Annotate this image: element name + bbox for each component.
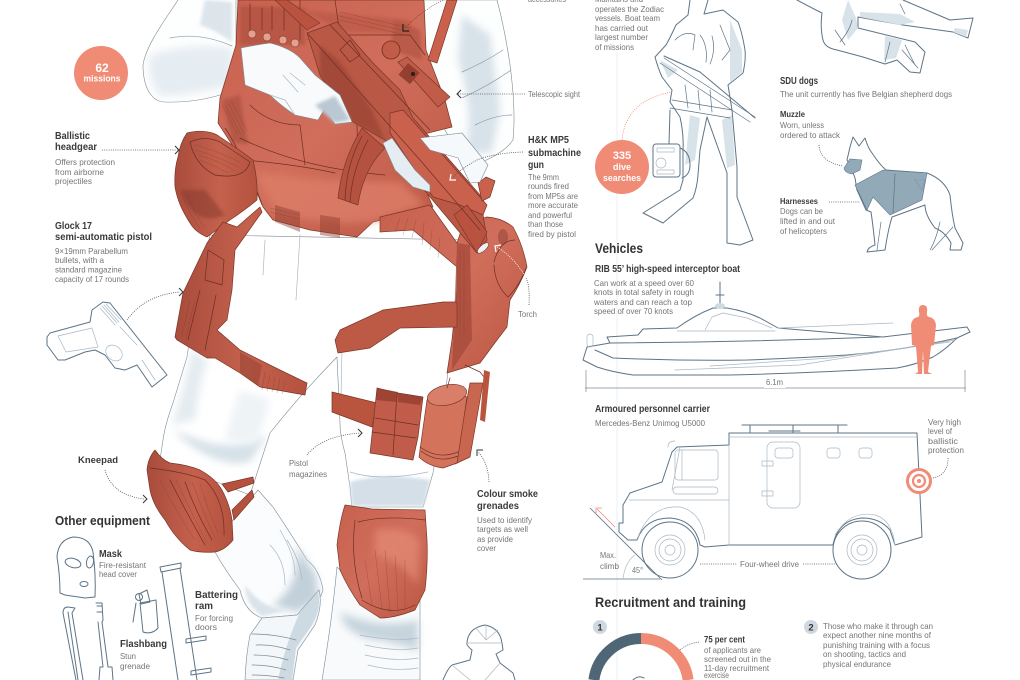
text: SDU dogs xyxy=(780,76,952,99)
label: colour smoke grenades: as provide xyxy=(477,534,513,544)
soldier: magazine pouch xyxy=(332,388,423,460)
soldier: submachine gun xyxy=(275,0,495,255)
text: armoured personnel carrier: Mercedes-Benz Unimog U5000 xyxy=(595,418,705,428)
text: muzzle xyxy=(780,109,843,166)
text: mask: head cover xyxy=(99,569,137,579)
label: ballistic headgear: Ballistic xyxy=(55,131,90,142)
label: colour smoke grenades: cover xyxy=(477,543,496,553)
text: battering ram: ram xyxy=(195,601,213,612)
text: harnesses: of helicopters xyxy=(780,226,827,236)
text: flashbang: Stun xyxy=(120,651,136,661)
panel: recruitment and training xyxy=(593,595,933,680)
badge: step 2 xyxy=(804,620,818,634)
heading: recruitment and training: Recruitment and training xyxy=(595,595,746,610)
boat dimension: 6.1m: 6.1m xyxy=(766,377,783,387)
soldier: shoe xyxy=(245,590,320,680)
diagram: maximum climb angle: 45° xyxy=(632,565,643,575)
text: 75 per cent: exercise xyxy=(704,670,729,680)
arrow: ballistic headgear xyxy=(102,146,179,154)
text: 75 per cent: of applicants are xyxy=(704,645,761,655)
label: Glock 17 pistol: standard magazine xyxy=(55,264,122,274)
stat: 335 dive searches: 335 xyxy=(613,150,631,162)
soldier: pistol holster and leg strap xyxy=(175,207,307,395)
text: harnesses xyxy=(780,196,860,236)
label: H&K MP5 submachine gun: and powerful xyxy=(528,210,572,220)
text: 75 per cent: screened out in the xyxy=(704,654,771,664)
label: H&K MP5 submachine gun: than those xyxy=(528,219,563,229)
label: four-wheel drive xyxy=(700,559,837,569)
icon: rifle tool xyxy=(96,603,113,680)
label: pistol magazines: Pistol xyxy=(289,458,308,468)
text: mask xyxy=(99,549,147,579)
label: pistol magazines: magazines xyxy=(289,469,327,479)
diagram: maximum climb angle: climb xyxy=(600,561,619,571)
icon: dog with harness xyxy=(844,137,963,252)
diagram: maximum climb angle: Max. xyxy=(600,550,616,560)
label: ballistic headgear: headgear xyxy=(55,142,97,153)
text: RIB boat: knots in total safety in rough xyxy=(594,287,694,297)
label: H&K MP5 submachine gun: H&K MP5 xyxy=(528,135,569,146)
label: pistol magazines xyxy=(289,429,362,479)
soldier: thigh strap xyxy=(335,302,457,353)
chart: donut 75 per cent xyxy=(594,638,688,680)
text: RIB boat: RIB 55’ high-speed interceptor boat xyxy=(595,264,741,275)
soldier: trousers xyxy=(160,235,470,507)
text: harnesses: Harnesses xyxy=(780,196,818,206)
text: ballistic protection: level of xyxy=(928,426,953,436)
text: harnesses: Dogs can be xyxy=(780,206,823,216)
text: boat team description xyxy=(595,0,665,52)
text: boat team description: has carried out xyxy=(595,23,649,33)
label: ballistic headgear: from airborne xyxy=(55,167,104,177)
boat dimension: 6.1m xyxy=(585,370,966,392)
text: muzzle: Muzzle xyxy=(780,109,805,119)
soldier: left kneepad and straps xyxy=(147,450,254,552)
label: colour smoke grenades xyxy=(477,450,538,553)
label: telescopic sight: Telescopic sight xyxy=(528,89,581,99)
icon: rappelling soldier xyxy=(797,0,973,73)
label: ballistic headgear xyxy=(55,131,115,186)
icon: ballistic target xyxy=(908,470,930,492)
text: battering ram xyxy=(195,590,238,632)
text: step 2 description xyxy=(823,621,933,669)
label: kneepad xyxy=(78,455,147,503)
label: Glock 17 pistol: capacity of 17 rounds xyxy=(55,274,129,284)
label: Glock 17 pistol xyxy=(55,221,152,284)
text: boat team description: vessels. Boat team xyxy=(595,13,660,23)
label: H&K MP5 submachine gun: The 9mm xyxy=(528,172,559,182)
icon: kneeling soldier xyxy=(443,625,515,680)
text: RIB boat: waters and can reach a top xyxy=(593,297,692,307)
icon: boat xyxy=(583,282,970,375)
label: H&K MP5 submachine gun: more accurate xyxy=(528,200,578,210)
soldier: right glove xyxy=(241,43,352,124)
text: 75 per cent: 11-day recruitment xyxy=(704,663,770,673)
text: ballistic protection: protection xyxy=(928,445,964,455)
text: step 2 description: expect another nine months of xyxy=(823,630,932,640)
icon: battering ram xyxy=(160,563,211,680)
text: RIB boat: Can work at a speed over 60 xyxy=(594,278,694,288)
text: step 2 description: Those who make it through can xyxy=(823,621,933,631)
stat: 335 dive searches: searches xyxy=(603,173,641,183)
soldier: shoulder strap xyxy=(428,0,457,63)
icon: flashbang xyxy=(133,590,158,633)
heading: other equipment: Other equipment xyxy=(55,514,151,528)
text: battering ram: For forcing xyxy=(195,613,233,623)
soldier: vest upper xyxy=(218,0,452,238)
panel: other equipment xyxy=(55,514,238,680)
soldier: right kneepad xyxy=(337,505,427,618)
icon: mask xyxy=(57,537,95,598)
heading: vehicles: Vehicles xyxy=(595,241,643,256)
soldier: right sleeve xyxy=(425,0,514,175)
text: step 2 description: on shooting, tactics and xyxy=(823,649,906,659)
label: colour smoke grenades: Colour smoke xyxy=(477,489,538,500)
text: SDU dogs: SDU dogs xyxy=(780,76,818,87)
label: ballistic headgear: Offers protection xyxy=(55,157,115,167)
label: colour smoke grenades: Used to identify xyxy=(477,515,533,525)
text: muzzle: ordered to attack xyxy=(780,130,841,140)
label: colour smoke grenades: grenades xyxy=(477,501,519,512)
arrow: pistol xyxy=(127,288,183,320)
label: telescopic sight xyxy=(457,89,581,99)
text: muzzle: Worn, unless xyxy=(780,120,824,130)
label: kneepad: Kneepad xyxy=(78,455,118,466)
label: H&K MP5 submachine gun: submachine xyxy=(528,148,581,159)
text: ballistic protection: Very high xyxy=(928,417,961,427)
text: armoured personnel carrier: Armoured personnel carrier xyxy=(595,404,710,415)
stat: 62 missions: missions xyxy=(84,74,120,84)
label: H&K MP5 submachine gun: gun xyxy=(528,160,544,171)
soldier: lower left leg and shin xyxy=(215,490,323,618)
soldier: ballistic headgear pouch xyxy=(175,131,257,237)
label: four-wheel drive: Four-wheel drive xyxy=(740,559,799,569)
badge: step 1: 1 xyxy=(597,622,603,634)
soldier: lower right leg xyxy=(322,567,420,680)
stat: 62 missions xyxy=(74,46,128,100)
soldier: left glove xyxy=(383,133,488,192)
label: torch: Torch xyxy=(518,309,537,319)
arrow: accessories xyxy=(403,0,443,31)
text: RIB boat: speed of over 70 knots xyxy=(594,306,673,316)
text: harnesses: lifted in and out xyxy=(780,216,836,226)
icon: crowbar xyxy=(63,607,83,680)
text: 75 per cent: 75 per cent xyxy=(704,634,745,644)
label: H&K MP5 submachine gun: from MP5s are xyxy=(528,191,578,201)
label: Glock 17 pistol: bullets, with a xyxy=(55,255,104,265)
text: ballistic protection: ballistic xyxy=(928,436,959,446)
text: RIB boat xyxy=(593,264,741,316)
label: torch xyxy=(495,245,537,319)
text: boat team description: operates the Zodiac xyxy=(595,4,665,14)
badge: step 1 xyxy=(593,620,607,634)
text: armoured personnel carrier xyxy=(595,404,710,428)
soldier: left sleeve xyxy=(143,0,245,102)
text: battering ram: Battering xyxy=(195,590,238,601)
stat: 335 dive searches xyxy=(595,92,672,194)
icon: person scale figure xyxy=(911,305,936,374)
text: step 2 description: physical endurance xyxy=(823,659,891,669)
diagram: maximum climb angle xyxy=(583,508,662,580)
text: boat team description: largest number xyxy=(595,32,648,42)
panel: vehicles xyxy=(583,241,970,580)
text: flashbang: grenade xyxy=(120,661,150,671)
text: flashbang xyxy=(120,639,167,671)
icon: armoured personnel carrier xyxy=(619,425,922,579)
icon: frogman xyxy=(643,0,755,245)
badge: step 2: 2 xyxy=(808,622,814,634)
text: 75 per cent xyxy=(680,634,771,680)
text: mask: Mask xyxy=(99,549,122,560)
text: ballistic protection xyxy=(928,417,964,478)
text: boat team description: of missions xyxy=(595,42,634,52)
label: Glock 17 pistol: 9×19mm Parabellum xyxy=(55,246,128,256)
label: H&K MP5 submachine gun xyxy=(528,135,581,239)
soldier: smoke grenades xyxy=(419,365,490,468)
label: Glock 17 pistol: Glock 17 xyxy=(55,221,92,232)
text: step 2 description: punishing training with a focus xyxy=(823,640,930,650)
stat: 335 dive searches: dive xyxy=(613,162,631,172)
soldier illustration xyxy=(143,0,527,680)
arrow: submachine gun xyxy=(450,152,523,180)
text: battering ram: doors xyxy=(195,622,217,632)
label: ballistic headgear: projectiles xyxy=(55,176,92,186)
text: SDU dogs: The unit currently has five Belgian shepherd dogs xyxy=(780,89,952,99)
soldier: belt strap and torch pouch xyxy=(380,205,527,373)
label: colour smoke grenades: targets as well xyxy=(477,524,528,534)
text: flashbang: Flashbang xyxy=(120,639,167,650)
label: H&K MP5 submachine gun: fired by pistol xyxy=(528,229,576,239)
label: H&K MP5 submachine gun: rounds fired xyxy=(528,181,569,191)
stat: 62 missions: 62 xyxy=(95,61,109,75)
icon: pistol xyxy=(47,302,167,387)
label: Glock 17 pistol: semi-automatic pistol xyxy=(55,232,152,243)
text: mask: Fire-resistant xyxy=(99,560,147,570)
